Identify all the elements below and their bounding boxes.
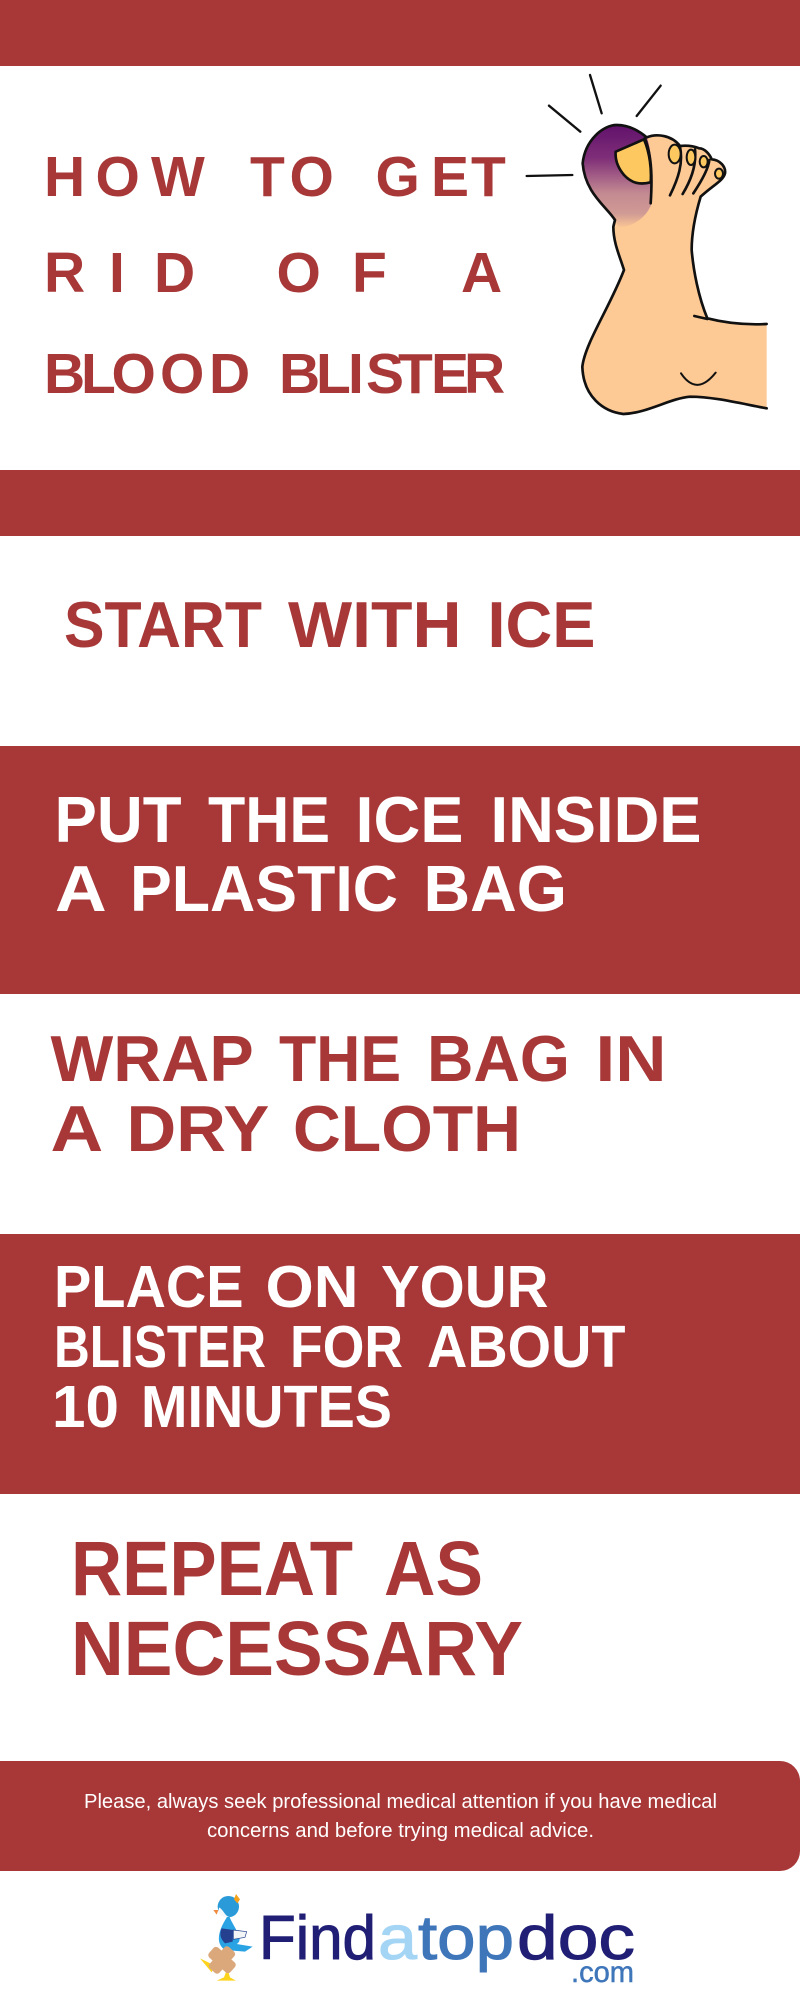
disclaimer panel: concerns and before trying medical advice.	[207, 1820, 594, 1842]
step 4 panel: ON	[266, 1254, 358, 1320]
blister bruise	[583, 125, 652, 227]
step 4 panel	[0, 1234, 800, 1494]
step 1: start with ice: ICE	[488, 588, 596, 661]
step 4 panel: 10	[52, 1374, 119, 1440]
toe divider lines	[645, 138, 709, 319]
step 1: start with ice: WITH	[288, 588, 462, 661]
big toenail	[616, 139, 651, 184]
step 4 panel: ABOUT	[427, 1314, 626, 1380]
step 2 panel: ICE	[356, 783, 464, 856]
title	[44, 145, 506, 406]
step 4 panel: YOUR	[381, 1254, 548, 1320]
foot shape	[582, 125, 767, 414]
logo wordmark: Find	[259, 1904, 376, 1973]
step 2 panel: INSIDE	[490, 783, 702, 856]
step 3: wrap the bag: WRAP	[50, 1022, 252, 1095]
foot outline	[582, 125, 767, 414]
step 2 panel	[0, 746, 800, 994]
step 3: wrap the bag: A	[50, 1092, 102, 1165]
logo wordmark: top	[418, 1904, 514, 1973]
disclaimer panel	[0, 1761, 800, 1871]
step 2 panel: THE	[208, 783, 330, 856]
title: BLOOD BLISTER	[44, 342, 505, 406]
step 3: wrap the bag: CLOTH	[293, 1092, 521, 1165]
step 2 panel: A	[55, 852, 106, 925]
logo domain: .com	[571, 1956, 634, 1989]
logo wordmark: a	[378, 1904, 418, 1973]
step 5: repeat as necessary: REPEAT	[71, 1526, 353, 1612]
divider band	[0, 470, 800, 536]
icon: bird mascot with bandage	[200, 1894, 253, 1981]
step 1: start with ice: START	[64, 588, 262, 661]
small toenails	[669, 145, 723, 179]
illustration: foot with blood blister on the big toe	[527, 75, 767, 414]
logo: Findatopdoc.com	[200, 1894, 635, 1989]
step 3: wrap the bag	[50, 1022, 666, 1165]
logo wordmark	[259, 1904, 635, 1973]
step 3: wrap the bag: IN	[596, 1022, 666, 1095]
icon: pain rays	[527, 75, 661, 176]
logo wordmark: doc	[517, 1904, 635, 1973]
title: HOW TO GET	[44, 145, 506, 209]
step 4 panel: MINUTES	[141, 1374, 392, 1440]
step 3: wrap the bag: DRY	[126, 1092, 269, 1165]
step 4 panel: FOR	[290, 1314, 403, 1380]
step 3: wrap the bag: BAG	[427, 1022, 570, 1095]
step 3: wrap the bag: THE	[279, 1022, 401, 1095]
disclaimer panel: Please, always seek professional medical attention if you have medical	[84, 1791, 717, 1813]
step 5: repeat as necessary	[71, 1526, 523, 1692]
step 4 panel: BLISTER	[54, 1314, 266, 1380]
step 5: repeat as necessary: NECESSARY	[71, 1606, 523, 1692]
top banner band	[0, 0, 800, 66]
step 2 panel: PUT	[54, 783, 182, 856]
step 5: repeat as necessary: AS	[384, 1526, 483, 1612]
step 2 panel: PLASTIC	[130, 852, 398, 925]
ankle bone mark	[681, 373, 716, 385]
step 2 panel: BAG	[424, 852, 567, 925]
step 4 panel: PLACE	[54, 1254, 244, 1320]
title: RID OF A	[44, 241, 502, 305]
